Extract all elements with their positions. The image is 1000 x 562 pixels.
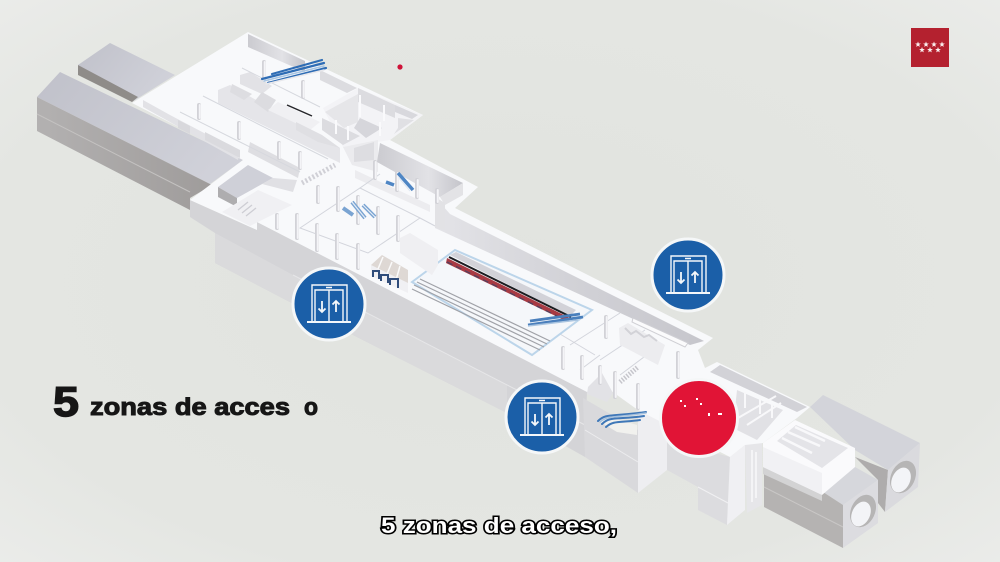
right end box xyxy=(763,420,855,501)
lower escalator xyxy=(597,412,646,435)
stairwell block xyxy=(587,373,613,402)
heading: 5 zonas de acceso: zonas de acces xyxy=(90,394,290,421)
icon: elevator south xyxy=(506,381,578,453)
stairs and floor lines xyxy=(300,165,660,382)
heading: 5 zonas de acceso xyxy=(53,378,318,425)
platform and train xyxy=(412,250,592,355)
lower left room xyxy=(218,165,297,226)
marker: red dot xyxy=(397,64,403,70)
escalator middle xyxy=(343,173,413,218)
station south wall xyxy=(190,200,587,457)
central north wall xyxy=(355,143,704,345)
marker: red circle xyxy=(660,380,738,456)
upper left tunnels xyxy=(37,43,243,210)
elevator blocks xyxy=(371,233,688,365)
upper wing rooms xyxy=(180,68,423,172)
heading: 5 zonas de acceso: 5 xyxy=(53,378,79,425)
icon: elevator north-east xyxy=(652,239,724,311)
icon: elevator west xyxy=(293,268,365,340)
subtitle: 5 zonas de acceso, xyxy=(381,513,617,538)
columns xyxy=(199,62,679,408)
back right tunnel xyxy=(810,395,921,512)
front right tunnel xyxy=(764,467,881,548)
upper wing walls xyxy=(143,34,357,178)
station floor plan xyxy=(132,32,810,457)
heading: 5 zonas de acceso: o xyxy=(304,394,318,421)
station east lower blocks xyxy=(583,398,762,525)
right end rooms xyxy=(710,365,807,440)
logo: Comunidad de Madrid xyxy=(911,28,949,67)
escalator upper xyxy=(262,60,326,84)
